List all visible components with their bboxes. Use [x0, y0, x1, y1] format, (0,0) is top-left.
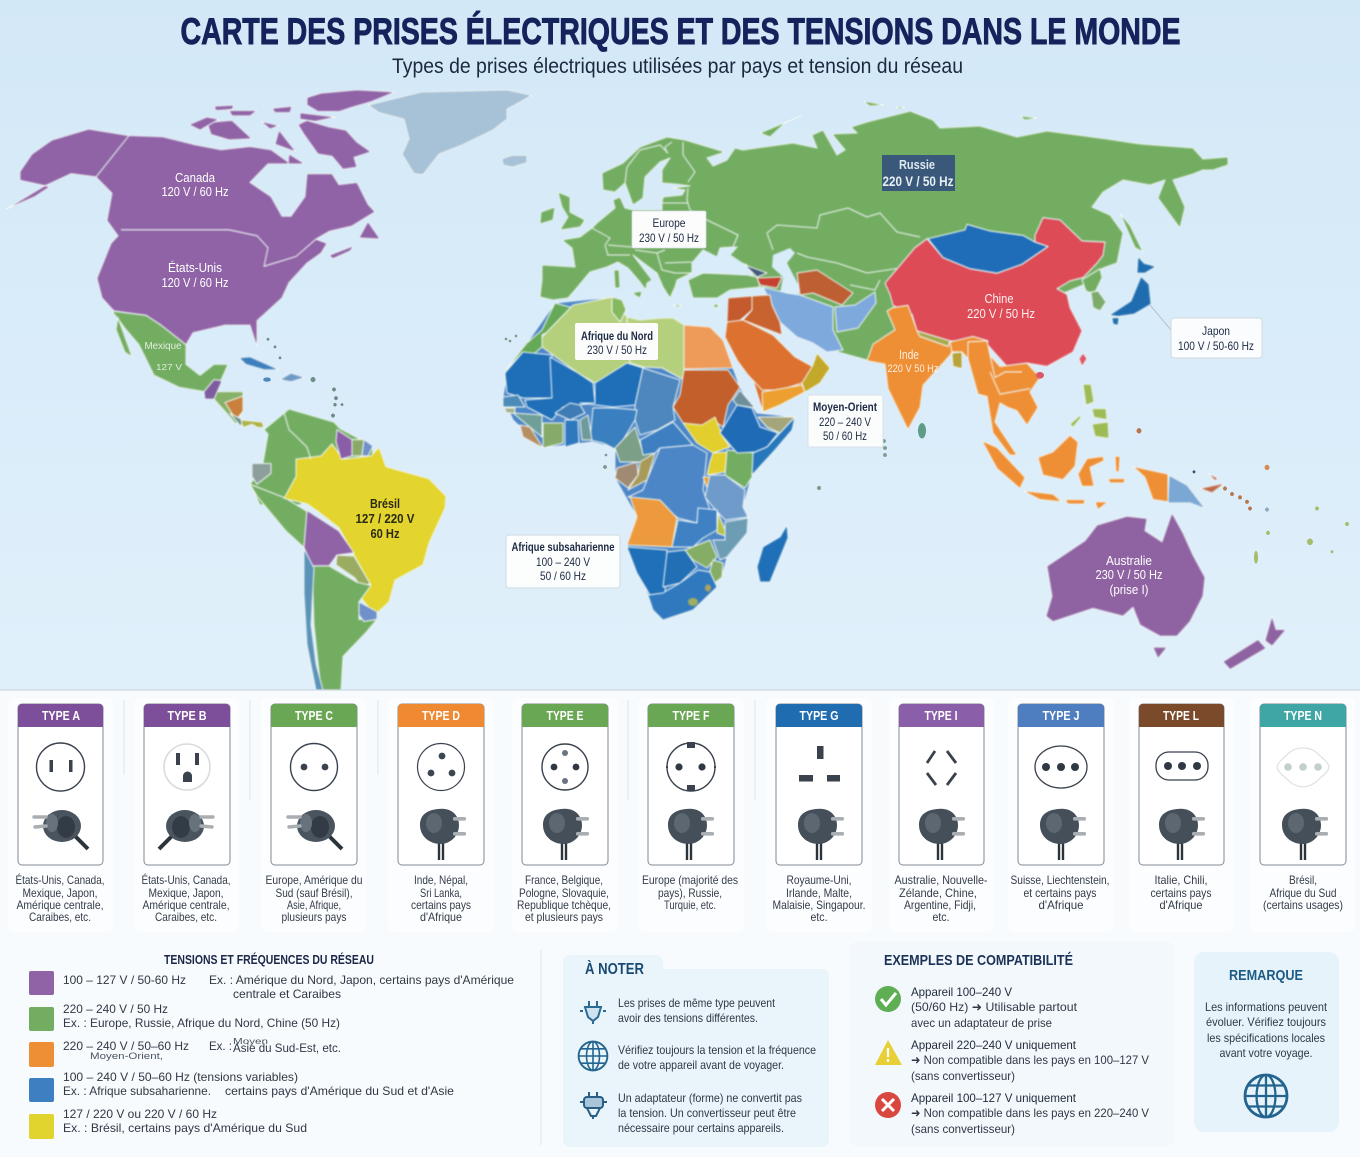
plug card: Type F: pays), Russie,: [658, 886, 722, 900]
icon: globe: [1245, 1075, 1287, 1117]
map label: Chine: Chine: [984, 292, 1014, 306]
legend item: orange: Moyen-Orient,: [90, 1051, 163, 1062]
legend item: green: Ex. : Europe, Russie, Afrique du Nord, Chine (50 Hz): [63, 1016, 340, 1030]
heading: compatibility examples: EXEMPLES DE COMPATIBILITÉ: [884, 952, 1073, 969]
heading: remark: REMARQUE: [1229, 967, 1303, 984]
plug card: Type F: TYPE F: [672, 708, 710, 723]
plug types row: [8, 698, 1355, 932]
map callout: Europe: 230 V / 50 Hz: [639, 231, 699, 245]
map label: Canada: Canada: [175, 171, 215, 185]
map label: Chine: [967, 292, 1035, 321]
text: same type note: Les prises de même type peuvent: [618, 996, 776, 1010]
text: remark body: les spécifications locales: [1207, 1031, 1325, 1045]
icon: socket warning: [580, 1001, 606, 1024]
plug card: Type A: Caraibes, etc.: [29, 910, 91, 924]
legend item: purple: Ex. : Amérique du Nord, Japon, certains pays d'Amérique: [209, 973, 514, 987]
map: Black Sea and Caspian: [692, 247, 800, 297]
legend item: purple: [29, 971, 514, 1001]
plug card: Type L: certains pays: [1150, 886, 1212, 900]
map label: Inde: 220 V 50 Hz: [888, 363, 938, 375]
text: remark body: avant votre voyage.: [1220, 1046, 1312, 1060]
text: 220-240 device: Appareil 220–240 V uniquement: [911, 1038, 1077, 1052]
text: universal device: avec un adaptateur de prise: [911, 1016, 1052, 1030]
map: Papua New Guinea and islands: [1136, 428, 1349, 564]
map: Southern Africa: [504, 334, 887, 620]
text: 100-127 device: ➜ Non compatible dans les pays en 220–240 V: [911, 1106, 1149, 1120]
plug card: Type J: [1008, 698, 1114, 932]
icon: cross: [875, 1092, 901, 1118]
plug card: Type E: Pologne, Slovaquie,: [519, 886, 609, 900]
map label: Brésil: [356, 497, 415, 541]
map label: Australie: Australie: [1106, 554, 1152, 568]
map: Caucasus: [745, 265, 782, 288]
map: India and South Asia: [867, 305, 988, 439]
plug card: Type G: [766, 698, 872, 932]
plug card: Type C: Asie, Afrique,: [287, 898, 341, 912]
map: Africa base: [503, 297, 795, 620]
text: verify note: Vérifiez toujours la tension et la fréquence: [618, 1043, 816, 1057]
map callout: Moyen-Orient: 50 / 60 Hz: [823, 429, 867, 443]
map label: Inde: [888, 348, 938, 375]
map callout: Afrique subsaharienne: Afrique subsaharienne: [512, 540, 615, 554]
map label: Russie: Russie: [899, 158, 935, 172]
map label: Brésil: 60 Hz: [370, 527, 400, 541]
plug card: Type L: d'Afrique: [1160, 898, 1203, 912]
map: Caribbean islands: [239, 338, 344, 418]
legend item: green: 220 – 240 V / 50 Hz: [63, 1002, 168, 1016]
map: Australia and New Zealand: [1046, 513, 1286, 669]
plug card: Type C: plusieurs pays: [282, 910, 346, 924]
plug card: Type N: Afrique du Sud: [1270, 886, 1336, 900]
plug card: Type E: Republique tchèque,: [517, 898, 611, 912]
map label: Australie: (prise I): [1110, 583, 1148, 597]
map callout: Europe: Europe: [652, 216, 686, 230]
map label: Brésil: Brésil: [370, 497, 400, 511]
heading: À noter: À NOTER: [585, 961, 644, 978]
legend item: yellow: [29, 1107, 307, 1139]
map: Central and East Africa: [615, 390, 795, 523]
map: Asia Pacific: [867, 213, 1349, 669]
plug card: Type A: Mexique, Japon,: [22, 886, 98, 900]
map callout: Moyen-Orient: Moyen-Orient: [813, 400, 877, 414]
map callout: Afrique du Nord: Afrique du Nord: [581, 329, 653, 343]
map callout: Japon: 100 V / 50-60 Hz: [1178, 339, 1254, 353]
map background: [0, 0, 1360, 690]
panel: compatibility examples: [850, 941, 1174, 1147]
map: Greenland: [368, 90, 532, 175]
map: Japan: [1109, 257, 1156, 325]
plug card: Type D: certains pays: [411, 898, 471, 912]
icon: check: [875, 986, 901, 1012]
plug card: Type A: TYPE A: [42, 708, 80, 723]
map: West Africa: [503, 352, 680, 450]
map label: Chine: 220 V / 50 Hz: [967, 307, 1035, 321]
world map: [5, 90, 1349, 690]
map label: Canada: 120 V / 60 Hz: [162, 185, 228, 199]
text: universal device: Appareil 100–240 V: [911, 985, 1012, 999]
plug card: Type A: Amérique centrale,: [16, 898, 104, 912]
panel: remark: [1194, 952, 1339, 1132]
plug card: Type N: Brésil,: [1289, 873, 1317, 887]
text: 220-240 device: (sans convertisseur): [911, 1069, 1015, 1083]
legend item: blue: certains pays d'Amérique du Sud et d'Asie: [225, 1084, 454, 1098]
map: Korea and Sakhalin: [1082, 213, 1143, 311]
map callout: Japon: Japon: [1202, 324, 1230, 338]
text: remark body: [1205, 1000, 1328, 1060]
map callout: Afrique subsaharienne: 50 / 60 Hz: [540, 569, 586, 583]
plug card: Type L: [1129, 698, 1234, 932]
plug card: Type I: Argentine, Fidji,: [904, 898, 976, 912]
plug card: Type B: Amérique centrale,: [142, 898, 230, 912]
map: Americas: [5, 90, 532, 690]
plug card: Type I: [889, 698, 994, 932]
map callout: Afrique subsaharienne: 100 – 240 V: [536, 555, 590, 569]
plug card: Type J: Suisse, Liechtenstein,: [1010, 873, 1110, 887]
map callout: Moyen-Orient: 220 – 240 V: [819, 415, 871, 429]
map callout: Afrique du Nord: [575, 323, 658, 360]
plug card: Type F: Europe (majorité des: [642, 873, 738, 887]
plug card: Type L: Italie, Chili,: [1154, 873, 1208, 887]
legend item: blue: 100 – 240 V / 50–60 Hz (tensions variables): [63, 1070, 298, 1084]
map label: Mexique: [144, 341, 183, 372]
text: adapter note: la tension. Un convertisseur peut être: [618, 1106, 796, 1120]
legend item: purple: 100 – 127 V / 50-60 Hz: [63, 973, 186, 987]
map callout: Japon: [1150, 305, 1262, 358]
plug card: Type B: Caraibes, etc.: [155, 910, 217, 924]
map: Middle East: [725, 295, 830, 412]
text: adapter note: [618, 1091, 802, 1135]
map: Eurasia base: [503, 101, 1228, 620]
plug card: Type G: Irlande, Malte,: [786, 886, 852, 900]
legend item: purple: centrale et Caraibes: [233, 987, 341, 1001]
map label: États-Unis: 120 V / 60 Hz: [162, 276, 228, 290]
map label: Mexique: 127 V: [156, 363, 183, 372]
map label: Australie: 230 V / 50 Hz: [1096, 568, 1162, 582]
map: Turkey and islands of Europe: [540, 101, 1038, 308]
plug card: Type G: Royaume-Uni,: [786, 873, 852, 887]
plug card: Type D: Inde, Népal,: [414, 873, 468, 887]
plug card: Type N: (certains usages): [1263, 898, 1343, 912]
legend item: yellow: 127 / 220 V ou 220 V / 60 Hz: [63, 1107, 217, 1121]
text: 220-240 device: ➜ Non compatible dans les pays en 100–127 V: [911, 1053, 1149, 1067]
map: Mongolia: [928, 224, 1048, 273]
text: same type note: [618, 996, 776, 1025]
plug card: Type N: [1250, 698, 1355, 932]
plug card: Type J: d'Afrique: [1038, 898, 1084, 912]
map label: Mexique: Mexique: [144, 341, 182, 352]
map callout: Europe: [632, 211, 706, 248]
map: China: [885, 218, 1105, 366]
map label: États-Unis: [162, 260, 228, 290]
map callout: Moyen-Orient: [808, 395, 883, 447]
plug card: Type B: TYPE B: [168, 708, 206, 723]
map: Indochina borders: [990, 355, 1030, 394]
legend item: orange: Moyen: [233, 1037, 268, 1046]
map: European and Central Asian borders: [592, 142, 920, 290]
plug card: Type E: TYPE E: [546, 708, 584, 723]
map label: Russie: [882, 155, 955, 191]
legend item: yellow: Ex. : Brésil, certains pays d'Amérique du Sud: [63, 1121, 307, 1135]
icon: warning: [875, 1040, 902, 1065]
plug card: Type I: Australie, Nouvelle-: [894, 873, 988, 887]
map label: Australie: [1096, 554, 1162, 597]
legend item: orange: Asie du Sud-Est, etc.: [233, 1041, 341, 1055]
plug card: Type G: Malaisie, Singapour.: [772, 898, 866, 912]
plug card: Type B: Mexique, Japon,: [148, 886, 224, 900]
map: North America: [5, 90, 395, 347]
text: verify note: de votre appareil avant de voyager.: [618, 1058, 784, 1072]
panel: À noter: [563, 955, 829, 1147]
map: land masses: [5, 90, 1349, 690]
plug card: Type D: Sri Lanka,: [420, 886, 462, 900]
legend: network voltages and frequencies: [29, 952, 514, 1139]
text: verify note: [618, 1043, 816, 1072]
legend item: orange: [29, 1037, 341, 1067]
plug card: Type E: et plusieurs pays: [525, 910, 603, 924]
text: universal device: [911, 985, 1078, 1030]
plug card: Type E: [512, 698, 618, 932]
plug card: Type F: [638, 698, 744, 932]
text: 100-127 device: Appareil 100–127 V uniquement: [911, 1091, 1077, 1105]
plug card: Type I: TYPE I: [924, 708, 958, 723]
plug card: Type D: TYPE D: [422, 708, 460, 723]
map label: États-Unis: États-Unis: [168, 260, 222, 275]
text: universal device: (50/60 Hz) ➜ Utilisable partout: [911, 1000, 1078, 1014]
icon: converter plug: [580, 1092, 607, 1119]
map: Iran, Afghanistan, Turkmenistan: [763, 270, 876, 352]
text: adapter note: Un adaptateur (forme) ne convertit pas: [618, 1091, 802, 1105]
plug card: Type B: États-Unis, Canada,: [142, 872, 230, 887]
plug card: Type J: et certains pays: [1024, 886, 1096, 900]
plug card: Type D: [388, 698, 494, 932]
bottom panel background: [0, 690, 1360, 1157]
map label: Canada: [162, 171, 228, 199]
icon: globe small: [579, 1042, 607, 1070]
map: Mexico and Central America: [112, 311, 264, 428]
plug card: Type G: etc.: [810, 910, 828, 924]
plug card: Type I: Zélande, Chine,: [899, 886, 977, 900]
legend item: orange: 220 – 240 V / 50–60 Hz: [63, 1039, 189, 1053]
legend item: orange: Ex. :: [209, 1039, 232, 1053]
plug card: Type C: Sud (sauf Brésil),: [276, 886, 352, 900]
subtitle: Types de prises électriques utilisées par pays et tension du réseau: [392, 55, 963, 78]
text: remark body: évoluer. Vérifiez toujours: [1206, 1015, 1326, 1029]
map: Philippines: [1070, 384, 1109, 439]
plug card: Type I: etc.: [932, 910, 950, 924]
map: US and Canada borders: [96, 136, 316, 266]
text: adapter note: nécessaire pour certains appareils.: [618, 1121, 784, 1135]
plug card: Type A: [8, 698, 113, 932]
plug card: Type J: TYPE J: [1042, 708, 1080, 723]
legend heading: TENSIONS ET FRÉQUENCES DU RÉSEAU: [164, 952, 374, 967]
map callout: Afrique du Nord: 230 V / 50 Hz: [587, 343, 647, 357]
legend item: green: [29, 1002, 340, 1031]
plug card: Type G: TYPE G: [800, 708, 838, 723]
plug card: Type E: France, Belgique,: [525, 873, 603, 887]
map: South America: [250, 409, 446, 690]
legend item: blue: [29, 1070, 454, 1102]
map label: Brésil: 127 / 220 V: [356, 512, 415, 526]
text: remark body: Les informations peuvent: [1205, 1000, 1328, 1014]
legend item: blue: Ex. : Afrique subsaharienne.: [63, 1084, 211, 1098]
plug card: Type C: [261, 698, 366, 932]
map label: Inde: Inde: [899, 348, 919, 362]
plug card: Type L: TYPE L: [1163, 708, 1199, 723]
map: Southeast Asia: [968, 341, 1168, 510]
map: Taiwan and Hainan: [1036, 353, 1087, 379]
plug card: Type C: TYPE C: [295, 708, 333, 723]
plug card: Type D: d'Afrique: [420, 910, 462, 924]
text: same type note: avoir des tensions différentes.: [618, 1011, 758, 1025]
text: 220-240 device: [911, 1038, 1149, 1083]
text: 100-127 device: [911, 1091, 1149, 1136]
text: 100-127 device: (sans convertisseur): [911, 1122, 1015, 1136]
plug card: Type A: États-Unis, Canada,: [16, 872, 104, 887]
plug card: Type B: [134, 698, 239, 932]
plug card: Type N: TYPE N: [1284, 708, 1322, 723]
plug card: Type C: Europe, Amérique du: [266, 873, 362, 887]
map callout: Afrique subsaharienne: [506, 535, 620, 588]
map label: Russie: 220 V / 50 Hz: [882, 174, 954, 189]
plug card: Type F: Turquie, etc.: [664, 898, 716, 912]
map: North Africa: [504, 297, 740, 427]
